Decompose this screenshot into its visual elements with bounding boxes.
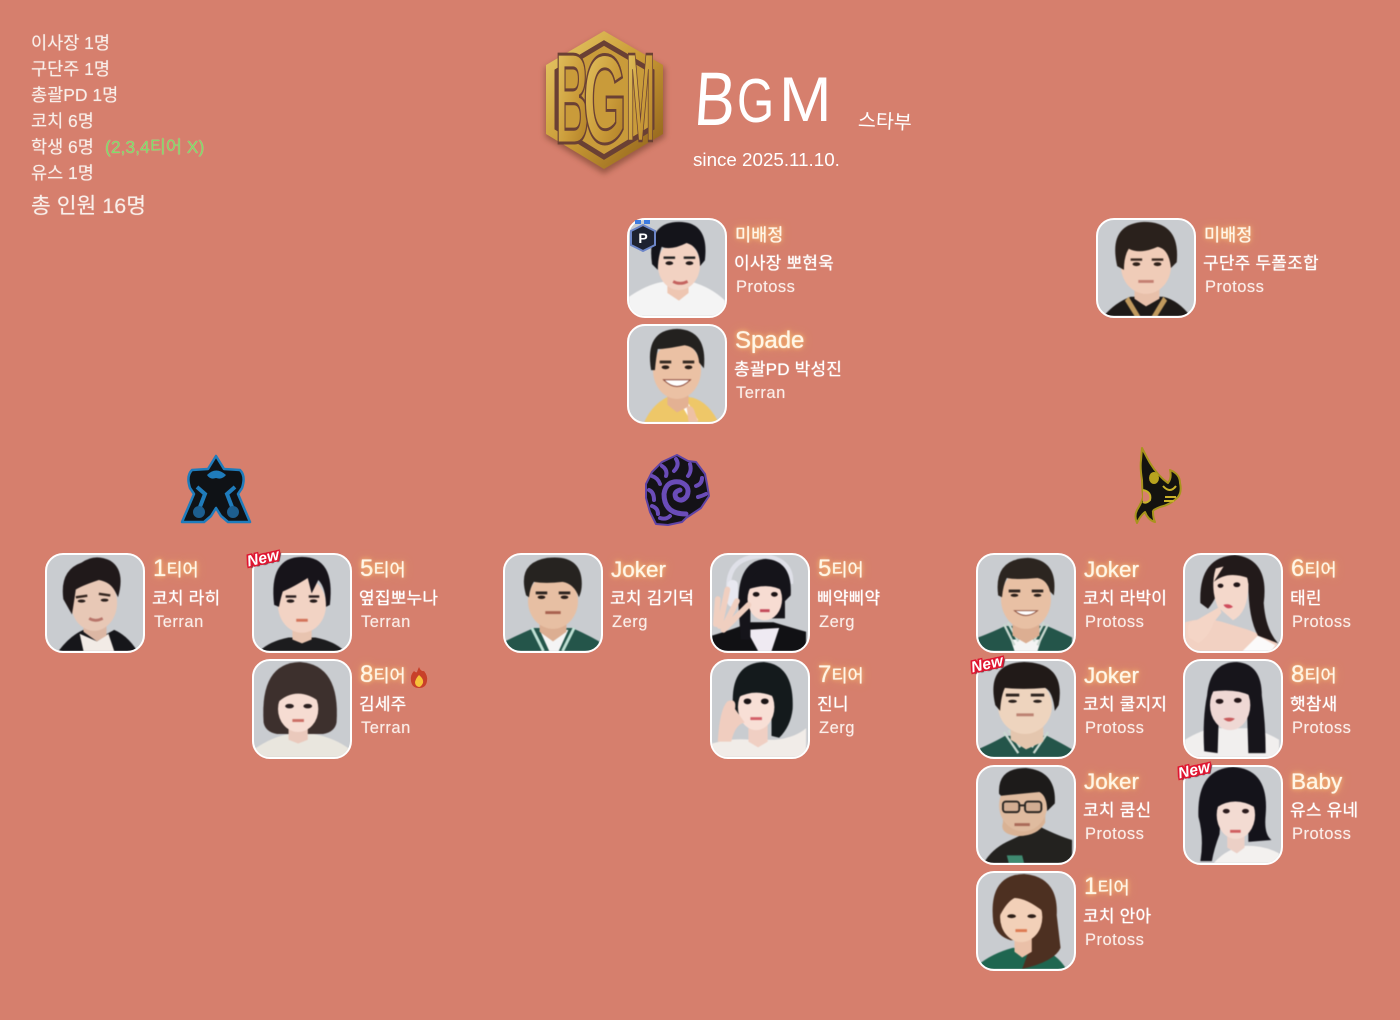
- headcount: chairman: 이사장 1명: [31, 33, 110, 53]
- portrait: [1183, 765, 1283, 865]
- race: Terran: [361, 613, 411, 631]
- race: Zerg: [819, 719, 855, 737]
- tier label: 1티어: [153, 555, 199, 582]
- portrait: [1096, 218, 1196, 318]
- race: Terran: [154, 613, 204, 631]
- player name: 유스 유네: [1290, 801, 1358, 820]
- tier label: 미배정: [735, 225, 783, 245]
- race: Zerg: [612, 613, 648, 631]
- card: Taerin: [1183, 553, 1351, 653]
- portrait: [976, 659, 1076, 759]
- portrait: [1183, 553, 1283, 653]
- headcount: coaches: 코치 6명: [31, 111, 94, 131]
- tier label: 6티어: [1291, 555, 1337, 582]
- card: owner: [1096, 218, 1319, 318]
- player name: 이사장 뽀현욱: [734, 254, 834, 273]
- BGM gold hexagon logo: [542, 26, 668, 176]
- headcount: students: [31, 137, 204, 157]
- tier label: Spade: [735, 327, 804, 354]
- card: coach Ana: [976, 871, 1152, 971]
- title BGM: G: [737, 66, 774, 135]
- card: coach Kuljiji: [976, 659, 1167, 759]
- portrait: [1183, 659, 1283, 759]
- player name: 코치 라히: [152, 589, 220, 608]
- card: coach Rabaki: [976, 553, 1167, 653]
- tier label: 8티어: [1291, 661, 1337, 688]
- race: Protoss: [736, 278, 795, 296]
- portrait: [627, 218, 727, 318]
- player name: 코치 쿰신: [1083, 801, 1151, 820]
- player name: 삐약삐약: [817, 589, 880, 608]
- tier label: 5티어: [818, 555, 864, 582]
- BGM gold hexagon logo: G: [583, 29, 627, 170]
- portrait: [252, 553, 352, 653]
- card: Yune: [1183, 765, 1358, 865]
- portrait: [710, 553, 810, 653]
- race: Protoss: [1292, 719, 1351, 737]
- tier label: 8티어: [360, 661, 406, 688]
- race: Protoss: [1292, 825, 1351, 843]
- subtitle 스타부: 스타부: [857, 110, 912, 134]
- icon: fire: [410, 667, 428, 688]
- title BGM: M: [779, 65, 831, 135]
- card: Ppiyak: [710, 553, 880, 653]
- player name: 코치 라박이: [1083, 589, 1167, 608]
- icon: Protoss emblem: [1134, 447, 1182, 524]
- portrait: [976, 765, 1076, 865]
- headcount: youth: 유스 1명: [31, 163, 94, 183]
- card: coach Rahee: [45, 553, 220, 653]
- race: Terran: [361, 719, 411, 737]
- portrait: [45, 553, 145, 653]
- player name: 김세주: [359, 695, 407, 714]
- tier label: Baby: [1291, 769, 1342, 794]
- badge: P rank: P: [638, 230, 648, 246]
- portrait: [503, 553, 603, 653]
- player name: 코치 쿨지지: [1083, 695, 1167, 714]
- player name: 햇참새: [1290, 695, 1338, 714]
- icon: Zerg emblem: [645, 454, 710, 526]
- card: chairman: [627, 218, 834, 318]
- tier label: 1티어: [1084, 873, 1130, 900]
- card: coach Kumsin: [976, 765, 1151, 865]
- race: Zerg: [819, 613, 855, 631]
- race: Protoss: [1085, 719, 1144, 737]
- race: Protoss: [1205, 278, 1264, 296]
- badge: New: New: [246, 547, 281, 570]
- badge: New: New: [970, 653, 1005, 676]
- card: Kim Seju: [252, 659, 428, 759]
- card: general PD: [627, 324, 842, 424]
- title BGM: [692, 60, 831, 135]
- card: Yeopjip: [252, 553, 438, 653]
- tier label: Joker: [1084, 663, 1139, 688]
- player name: 옆집뽀누나: [359, 589, 438, 608]
- portrait: [627, 324, 727, 424]
- tier label: 미배정: [1204, 225, 1252, 245]
- race: Protoss: [1085, 825, 1144, 843]
- headcount: students: 학생 6명: [31, 137, 94, 157]
- headcount: students: (2,3,4티어 X): [105, 137, 204, 157]
- portrait: [252, 659, 352, 759]
- player name: 태린: [1290, 589, 1322, 608]
- card: Haetchamsae: [1183, 659, 1351, 759]
- tier label: 7티어: [818, 661, 864, 688]
- tier label: Joker: [1084, 557, 1139, 582]
- headcount: total: 총 인원 16명: [31, 194, 146, 218]
- player name: 코치 안아: [1083, 907, 1151, 926]
- player name: 구단주 두폴조합: [1203, 254, 1319, 273]
- BGM gold hexagon logo: B: [555, 26, 589, 171]
- badge: New: New: [1177, 759, 1212, 782]
- tier label: Joker: [611, 557, 666, 582]
- race: Protoss: [1085, 931, 1144, 949]
- card: coach Kim Gideok: [503, 553, 694, 653]
- player name: 진니: [817, 695, 849, 714]
- portrait: [976, 553, 1076, 653]
- headcount: owner: 구단주 1명: [31, 59, 110, 79]
- headcount: general PD: 총괄PD 1명: [31, 85, 118, 105]
- race: Terran: [736, 384, 786, 402]
- BGM gold hexagon logo: M: [626, 26, 655, 168]
- since date: since 2025.11.10.: [693, 149, 840, 170]
- player name: 코치 김기덕: [610, 589, 694, 608]
- portrait: [976, 871, 1076, 971]
- portrait: [710, 659, 810, 759]
- tier label: 5티어: [360, 555, 406, 582]
- icon: Terran emblem: [180, 454, 252, 524]
- race: Protoss: [1292, 613, 1351, 631]
- headcount summary: [31, 33, 204, 218]
- tier label: Joker: [1084, 769, 1139, 794]
- badge: P rank: [630, 220, 656, 252]
- card: Jinny: [710, 659, 864, 759]
- race: Protoss: [1085, 613, 1144, 631]
- player name: 총괄PD 박성진: [734, 360, 842, 379]
